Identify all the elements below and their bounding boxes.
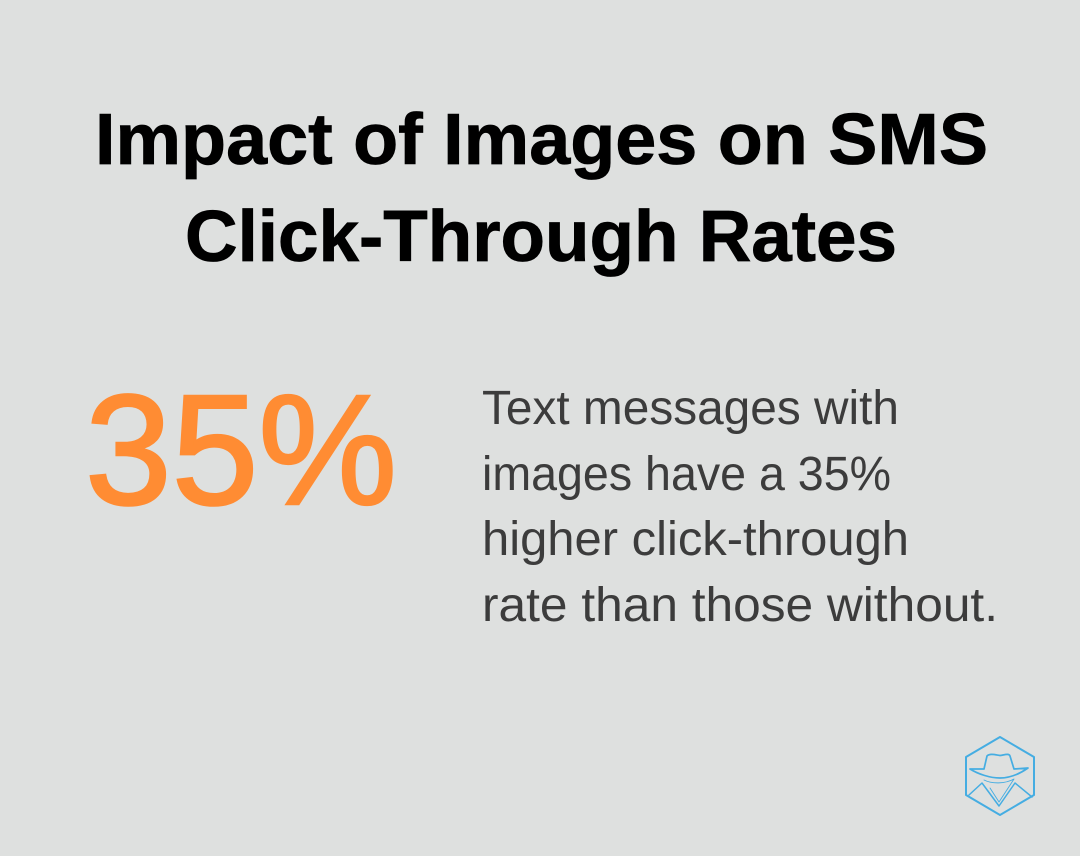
- description text: higher click-through: [482, 513, 909, 566]
- title: [95, 100, 988, 277]
- title: Click-Through Rates: [185, 197, 897, 277]
- description text: [482, 382, 998, 632]
- hexagon outline: [966, 737, 1034, 815]
- title: Impact of Images on SMS: [95, 100, 988, 180]
- icon: spy logo in hexagon: [966, 737, 1034, 815]
- collar and lapels: [969, 783, 1032, 806]
- description text: images have a 35%: [482, 448, 891, 501]
- big stat: 35%: 35%: [85, 363, 397, 538]
- description text: rate than those without.: [482, 579, 998, 632]
- description text: Text messages with: [482, 382, 899, 435]
- hat: [970, 754, 1028, 778]
